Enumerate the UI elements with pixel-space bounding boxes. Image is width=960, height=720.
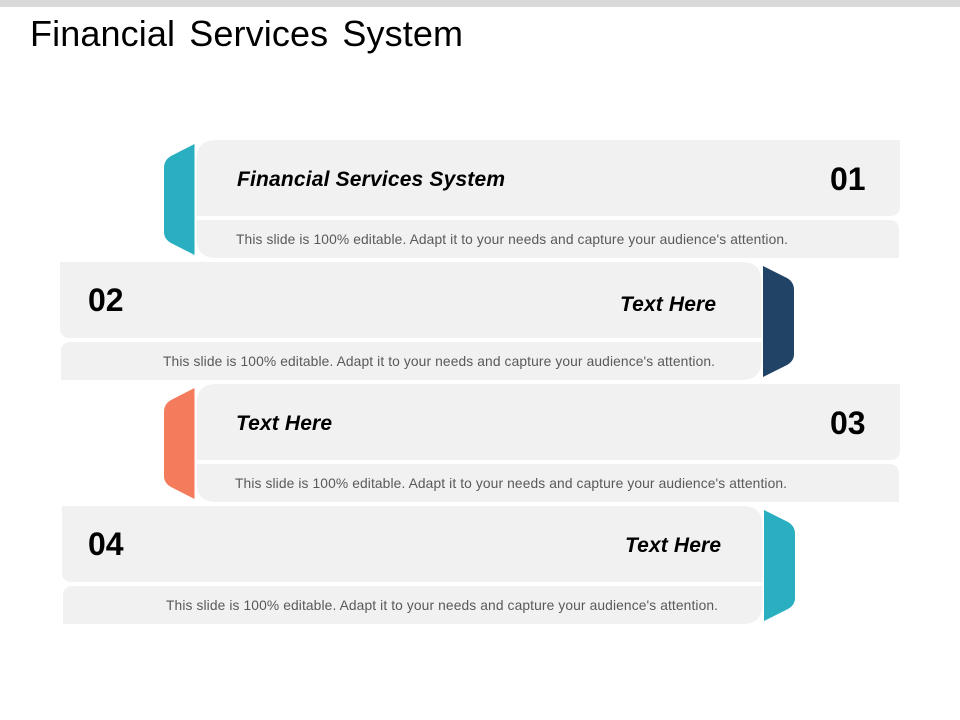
panel: row 04 [62,506,795,624]
icon: coral side tab 03 [164,388,194,499]
number 02: 02 [88,282,124,318]
heading 03: Text Here [236,412,332,435]
heading panel 03 [196,384,900,460]
description 01: This slide is 100% editable. Adapt it to your needs and capture your audience's attention. [236,232,788,247]
icon: teal side tab 04 [764,510,795,621]
heading 01: Financial Services System [237,168,505,191]
description 03: This slide is 100% editable. Adapt it to your needs and capture your audience's attention. [235,476,787,491]
number 01: 01 [830,161,866,197]
title: Financial Services System [30,13,463,54]
heading panel 02 [60,262,762,338]
icon: navy side tab 02 [763,266,794,377]
heading panel 04 [62,506,762,582]
heading 02: Text Here [620,293,716,316]
panel: row 03 [164,384,900,502]
description panel 02 [61,342,762,380]
description panel 01 [196,220,899,258]
heading 04: Text Here [625,534,721,557]
panel: row 01 [164,140,900,258]
description panel 04 [63,586,762,624]
panel: row 02 [60,262,794,380]
icon: teal side tab 01 [164,144,194,255]
description panel 03 [196,464,899,502]
description 02: This slide is 100% editable. Adapt it to your needs and capture your audience's attention. [163,354,715,369]
description 04: This slide is 100% editable. Adapt it to your needs and capture your audience's attention. [166,598,718,613]
heading panel 01 [196,140,900,216]
number 03: 03 [830,405,866,441]
number 04: 04 [88,526,124,562]
